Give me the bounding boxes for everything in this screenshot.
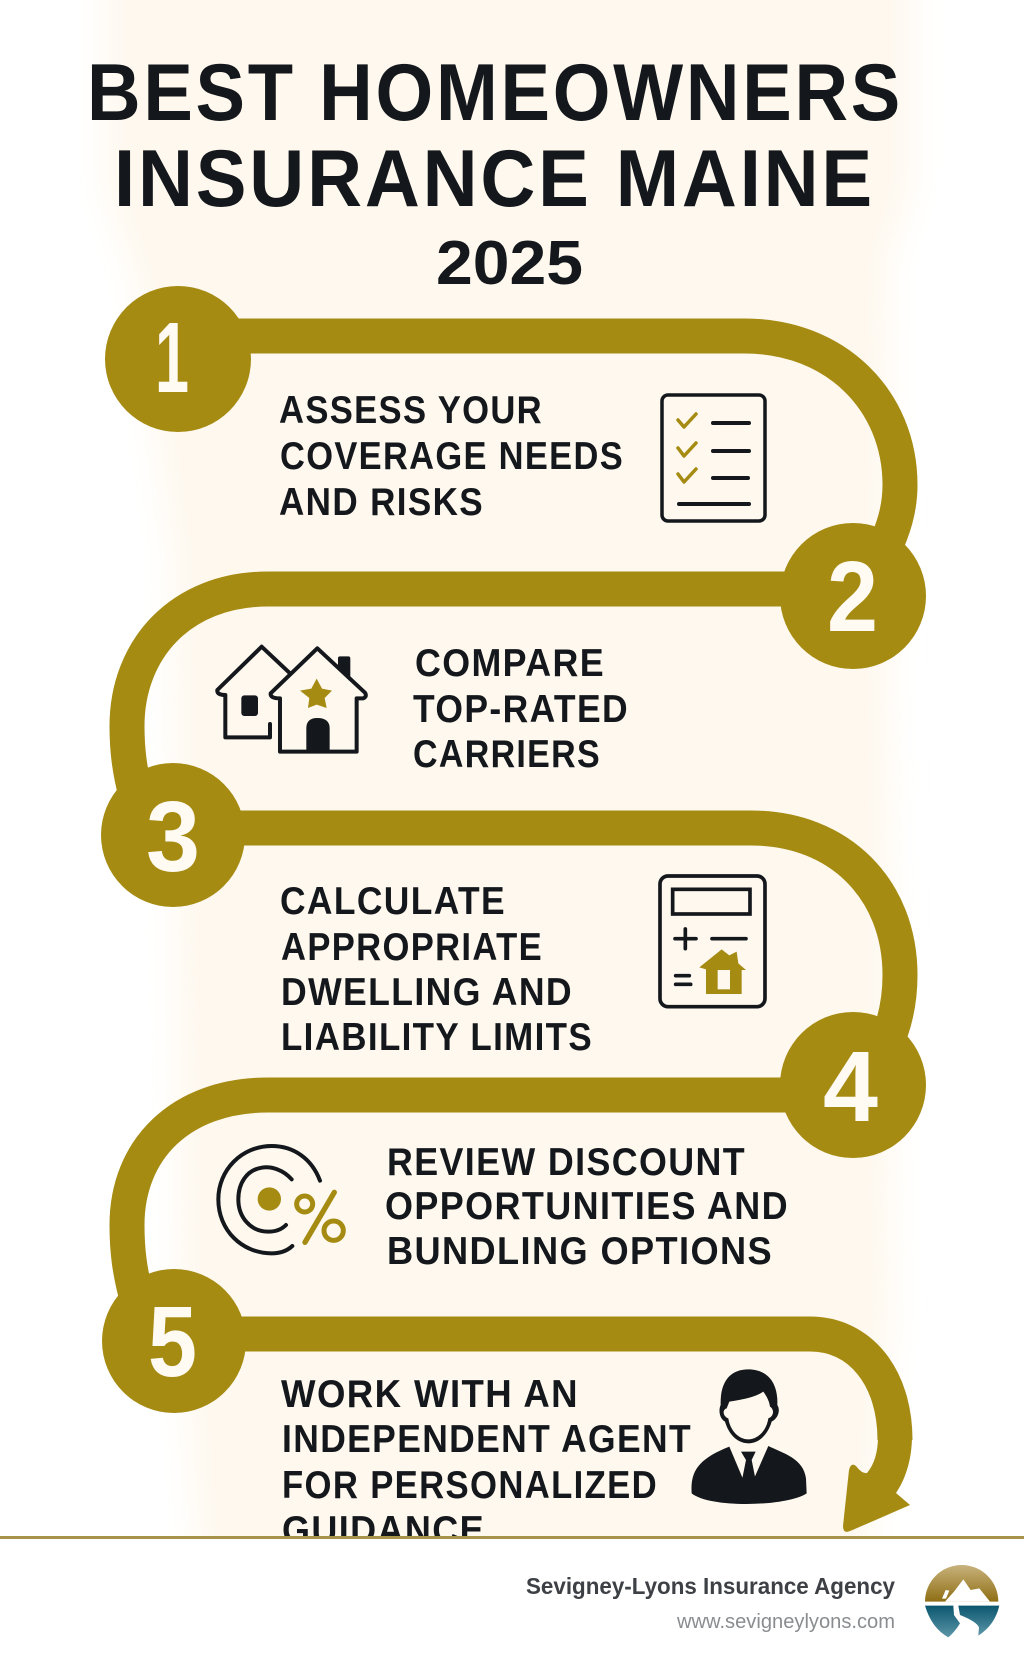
step 2 badge (780, 523, 926, 669)
step 5 text (281, 1373, 692, 1552)
step 4 text (385, 1141, 789, 1273)
agency url: www.sevigneylyons.com (676, 1611, 895, 1633)
arrowhead (843, 1436, 912, 1532)
cream background panel (105, 0, 912, 1560)
step 4 text: BUNDLING OPTIONS (387, 1230, 773, 1273)
step 5 text: GUIDANCE (282, 1509, 485, 1552)
step 4 badge: 4 (823, 1031, 878, 1143)
step 4 badge (780, 1012, 926, 1158)
step 2 text: TOP-RATED (413, 688, 629, 731)
step 3 text: LIABILITY LIMITS (281, 1016, 593, 1059)
step 2 text: COMPARE (415, 642, 605, 685)
step 3 badge (101, 763, 245, 907)
agency name: Sevigney-Lyons Insurance Agency (526, 1573, 895, 1599)
footer (0, 1536, 1024, 1666)
icon: calculator with house (660, 876, 765, 1007)
step 2 badge: 2 (827, 541, 878, 653)
step 3 text: DWELLING AND (281, 971, 573, 1014)
title: BEST HOMEOWNERS (87, 48, 903, 138)
step 5 text: INDEPENDENT AGENT (282, 1418, 692, 1461)
icon: houses with star (217, 647, 366, 752)
title (87, 48, 903, 298)
step 1 text (279, 389, 624, 524)
icon: agent (691, 1369, 807, 1504)
step 1 badge: 1 (155, 302, 189, 414)
icon: discount target with percent (218, 1146, 343, 1253)
step 1 badge (105, 286, 251, 432)
step 2 text (413, 642, 629, 776)
step 5 badge (102, 1269, 246, 1413)
step 1 text: COVERAGE NEEDS (280, 435, 624, 478)
step 3 badge: 3 (146, 781, 200, 893)
step 5 text: FOR PERSONALIZED (282, 1464, 658, 1507)
title: INSURANCE MAINE (114, 134, 875, 224)
step 4 text: OPPORTUNITIES AND (385, 1185, 789, 1228)
icon: checklist (662, 395, 765, 521)
title: 2025 (436, 229, 583, 298)
step 4 text: REVIEW DISCOUNT (387, 1141, 746, 1184)
step 3 text: APPROPRIATE (281, 926, 543, 969)
logo (925, 1565, 999, 1637)
step 2 text: CARRIERS (413, 733, 601, 776)
step 5 text: WORK WITH AN (281, 1373, 579, 1416)
step 3 text (280, 880, 593, 1059)
step 5 badge: 5 (148, 1286, 197, 1398)
step 3 text: CALCULATE (280, 880, 506, 923)
step 1 text: ASSESS YOUR (279, 389, 543, 432)
step 1 text: AND RISKS (279, 481, 484, 524)
winding gold track (127, 336, 900, 1440)
